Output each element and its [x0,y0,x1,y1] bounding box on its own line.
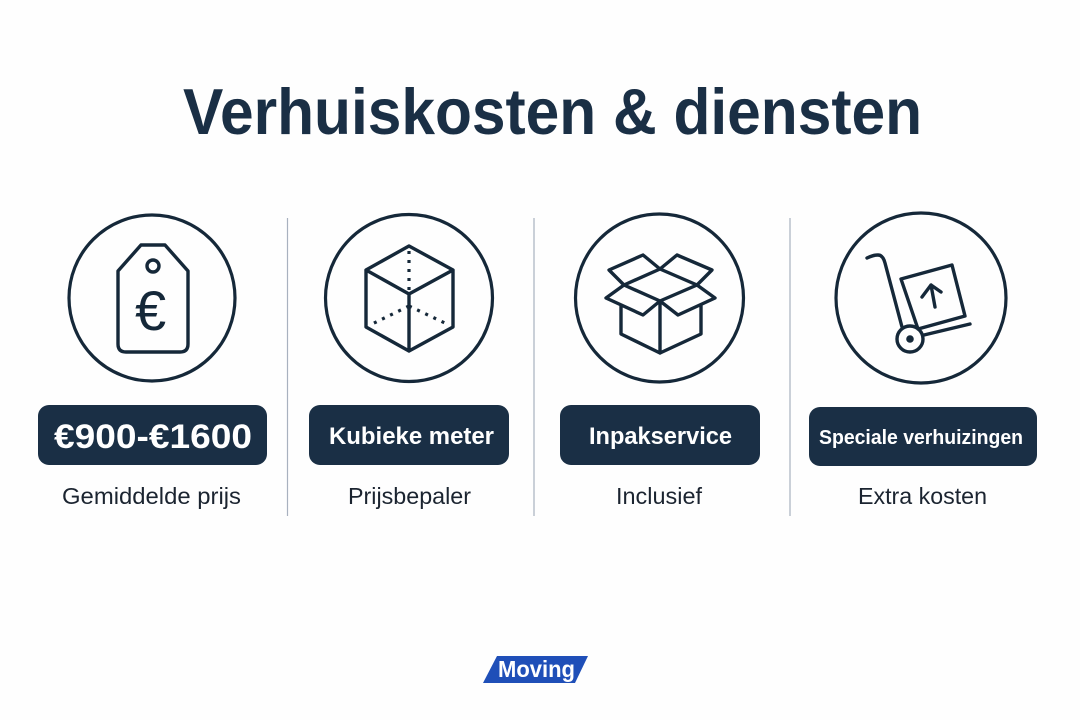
icon: price tag with euro [69,215,235,381]
badge: inpakservice: Inpakservice [589,423,732,450]
logo: moving: Moving [498,656,575,682]
price badge: €900-€1600 [54,418,252,456]
caption: inclusief: Inclusief [616,483,703,509]
badge: inpakservice [560,405,760,465]
panel: speciale verhuizingen [809,213,1037,509]
panel: kubieke meter [309,214,509,509]
icon: price tag with euro: € [135,279,166,342]
panel: inpakservice [560,214,760,509]
caption: extra kosten: Extra kosten [858,483,987,509]
badge: kubieke meter [309,405,509,465]
icon: cube [326,214,492,382]
title: Verhuiskosten & diensten [183,75,922,148]
icon: hand truck with box [836,213,1006,383]
panel: gemiddelde prijs [38,215,267,509]
badge: speciale verhuizingen [809,407,1037,466]
badge: kubieke meter: Kubieke meter [329,423,494,450]
icon: open box [576,214,744,382]
price badge [38,405,267,465]
caption: prijsbepaler: Prijsbepaler [348,483,471,509]
badge: speciale verhuizingen: Speciale verhuizingen [819,427,1023,449]
caption: gemiddelde prijs: Gemiddelde prijs [62,483,241,509]
